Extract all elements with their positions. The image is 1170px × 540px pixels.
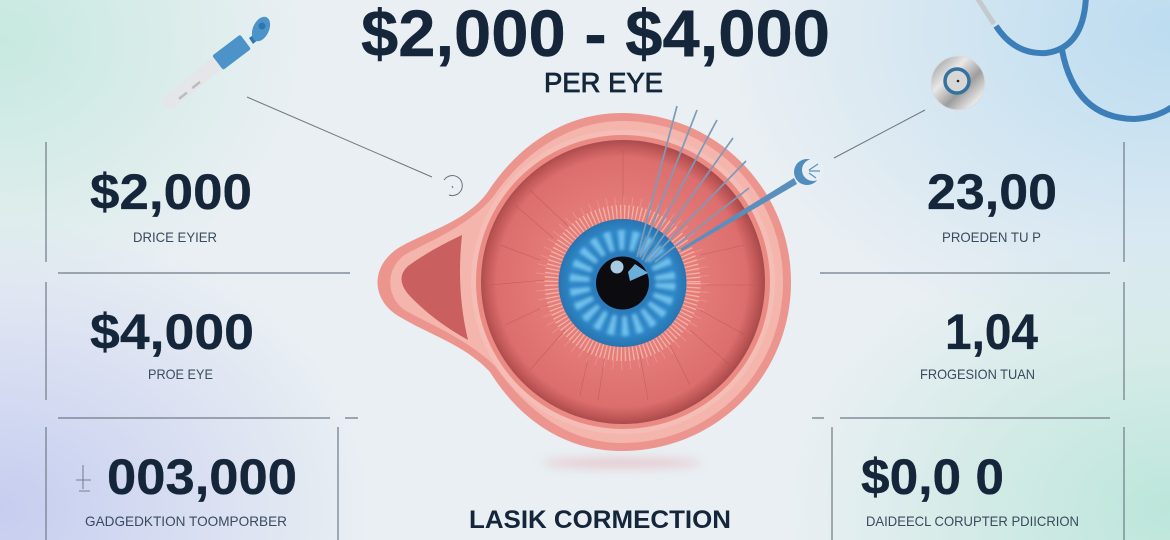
sclera bbox=[481, 140, 765, 424]
pupil highlights bbox=[610, 260, 624, 274]
connector line: left bbox=[247, 97, 432, 177]
icon: surgical pen bbox=[160, 14, 274, 111]
stat: right 2 bbox=[920, 304, 1038, 382]
icon: metal disk bbox=[931, 56, 985, 110]
stat: right 1: 23,00 bbox=[927, 164, 1057, 220]
stat: right 3: DAIDEECL CORUPTER PDIICRION bbox=[866, 513, 1079, 529]
stat: left 3: GADGEDKTION TOOMPORBER bbox=[85, 513, 287, 529]
stat: right 2: FROGESION TUAN bbox=[920, 366, 1035, 382]
icon: small sketched circle bbox=[444, 176, 462, 196]
stat: left 1: $2,000 bbox=[90, 164, 252, 220]
radial iris rays bbox=[540, 201, 704, 365]
icon: stethoscope bbox=[976, 0, 1170, 119]
stat: left 2: $4,000 bbox=[90, 304, 254, 360]
iris bbox=[558, 219, 686, 347]
divider frame lines bbox=[46, 142, 1124, 540]
pupil bbox=[596, 256, 649, 310]
stat: right 3 bbox=[861, 449, 1079, 529]
stat: right 1: PROEDEN TU P bbox=[942, 229, 1041, 245]
socket triangle bbox=[402, 235, 468, 340]
radial veins bbox=[490, 150, 755, 400]
stat: right 2: 1,04 bbox=[945, 304, 1038, 360]
caption: LASIK correction: LASIK CORMECTION bbox=[469, 506, 731, 534]
stat: left 3: 003,000 bbox=[107, 449, 297, 505]
stat: left 1: DRICE EYIER bbox=[133, 229, 217, 245]
stat: left 3 bbox=[76, 449, 297, 529]
eye outer shell with left bulge bbox=[378, 113, 791, 451]
sclera rim bbox=[471, 130, 775, 434]
probe head bbox=[794, 159, 824, 185]
laser needles bbox=[637, 106, 749, 262]
stat: left 2: PROE EYE bbox=[148, 366, 213, 382]
connector line: right bbox=[834, 110, 925, 158]
eye illustration bbox=[378, 106, 824, 451]
subtitle: per eye: PER EYE bbox=[544, 67, 663, 98]
stat: left 2 bbox=[90, 304, 254, 382]
iris light petals bbox=[580, 240, 666, 326]
laser probe bbox=[680, 178, 797, 251]
eye shadow bbox=[542, 458, 702, 468]
stat: left 1 bbox=[90, 164, 252, 245]
stat: right 3: $0,0 0 bbox=[861, 449, 1004, 505]
stat: right 1 bbox=[927, 164, 1057, 245]
